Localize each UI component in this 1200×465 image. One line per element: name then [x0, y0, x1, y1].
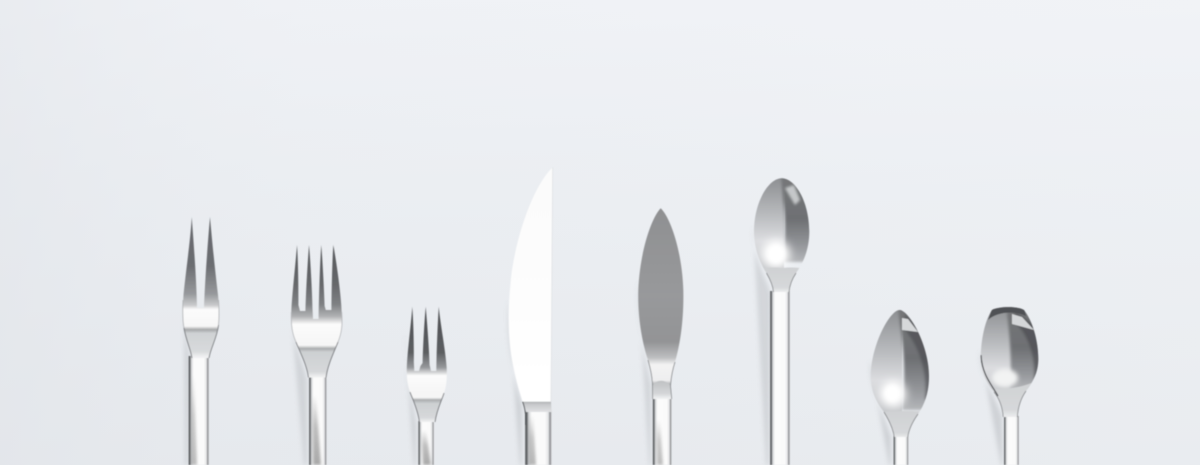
spoon handle: [894, 436, 908, 465]
knife shadow: [638, 280, 651, 465]
knife blade: [509, 167, 553, 402]
fork handle: [309, 376, 327, 465]
knife handle: [653, 398, 672, 465]
fork handle: [188, 356, 209, 465]
spoon bowl: [871, 309, 930, 438]
spoon shadow: [870, 360, 891, 465]
spoon bowl: [754, 178, 810, 292]
knife neck facet: [652, 381, 672, 399]
fork head: [183, 217, 219, 358]
steak knife: [508, 167, 553, 465]
long iced-tea spoon: [750, 176, 812, 465]
two-tine serving fork: [183, 217, 219, 465]
spoon bowl: [980, 306, 1039, 418]
spoon shadow: [753, 225, 771, 465]
fork shadow: [292, 325, 307, 465]
four-tine dinner fork: [291, 245, 342, 465]
fork head: [291, 245, 342, 378]
fork shadow: [405, 335, 416, 465]
three-tine small fork: [405, 307, 447, 465]
spoon shadow: [980, 350, 1003, 465]
knife bolster: [523, 402, 552, 412]
inner fork tine: [305, 245, 312, 311]
spoon handle: [1004, 416, 1019, 465]
pointed spoon: [866, 308, 932, 465]
fish knife: [638, 208, 683, 465]
fork shadow: [184, 305, 190, 465]
knife blade: [638, 208, 683, 399]
knife shadow: [508, 300, 522, 465]
fork handle: [418, 421, 434, 465]
spoon handle: [770, 291, 790, 465]
round-tip spoon: [980, 306, 1039, 465]
fork head: [407, 307, 447, 422]
knife handle: [525, 410, 552, 465]
